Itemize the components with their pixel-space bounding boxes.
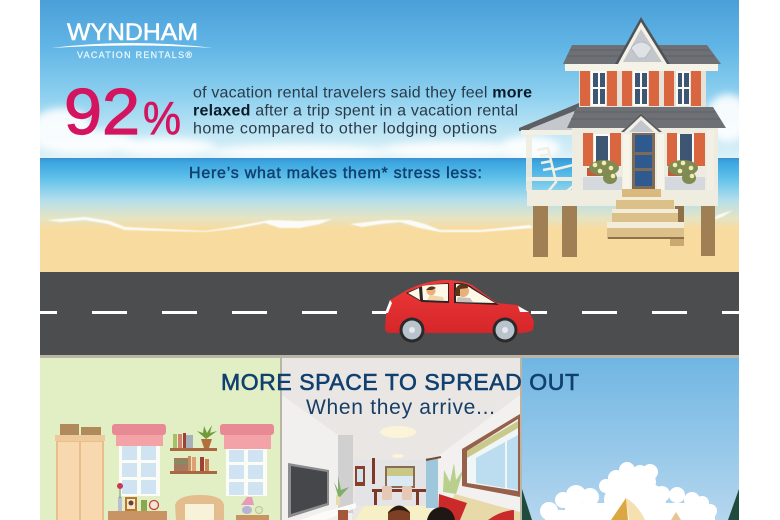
panel: living room <box>282 358 520 520</box>
text block: stat description: relaxed after a trip spent in a vacation rental <box>193 102 518 120</box>
panel: outdoors <box>522 358 739 520</box>
porch frame <box>521 130 581 135</box>
surf <box>47 210 733 232</box>
wardrobe <box>55 424 105 520</box>
people <box>388 506 455 520</box>
text block: stat description: home compared to other lodging options <box>193 120 497 138</box>
subheading: stress less: Here’s what makes them* stress less: <box>189 165 482 182</box>
nightstand and lamp <box>236 497 269 520</box>
passengers <box>426 284 473 302</box>
door <box>623 134 630 191</box>
gable <box>615 17 670 64</box>
illustration: red car <box>385 280 534 342</box>
logo: Wyndham Vacation Rentals: WYNDHAM <box>67 19 198 46</box>
steps <box>622 189 661 197</box>
flower boxes <box>587 160 698 184</box>
clouds <box>32 94 750 160</box>
porch gable <box>621 113 662 132</box>
divider strip <box>40 355 739 358</box>
dining set <box>372 489 427 505</box>
stilts <box>533 205 548 257</box>
sofa <box>438 494 520 520</box>
logo: Wyndham Vacation Rentals <box>51 19 213 60</box>
stat: 92%: % <box>143 92 181 144</box>
shelves with books and plant <box>170 425 217 474</box>
lower wall <box>572 128 718 190</box>
desk with ornaments <box>108 483 167 520</box>
lower roof <box>567 107 726 128</box>
window right <box>220 424 274 496</box>
plant <box>334 476 349 505</box>
pine trees <box>522 489 532 520</box>
illustration: beach house <box>519 17 726 257</box>
ceiling light <box>380 426 416 438</box>
text block: stat description <box>193 84 532 138</box>
panel: bedroom <box>40 358 280 520</box>
panel: beach scene <box>32 0 750 272</box>
panel: road <box>40 272 739 355</box>
upper roof <box>563 45 721 64</box>
right windows <box>426 414 520 508</box>
upper shutters and windows <box>580 71 701 106</box>
tent peaks <box>611 498 628 520</box>
icon: shell <box>631 42 652 58</box>
window left <box>112 424 166 496</box>
column <box>338 435 353 513</box>
cloud <box>540 462 717 520</box>
railing <box>583 177 705 190</box>
tv <box>288 463 329 518</box>
tv stand <box>300 503 356 520</box>
heading: more space: MORE SPACE TO SPREAD OUT <box>221 369 579 395</box>
logo: Wyndham Vacation Rentals: VACATION RENTALS® <box>77 50 192 60</box>
bed headboard <box>175 495 224 520</box>
upper wall <box>579 70 706 108</box>
stat: 92%: 92 <box>64 75 140 148</box>
text block: stat description: of vacation rental travelers said they feel more <box>193 84 532 102</box>
stat: 92% <box>64 75 181 148</box>
subheading: when they arrive: When they arrive... <box>306 396 495 419</box>
side porch roof <box>519 103 579 131</box>
back room <box>355 460 430 506</box>
rocking chair <box>537 148 573 197</box>
